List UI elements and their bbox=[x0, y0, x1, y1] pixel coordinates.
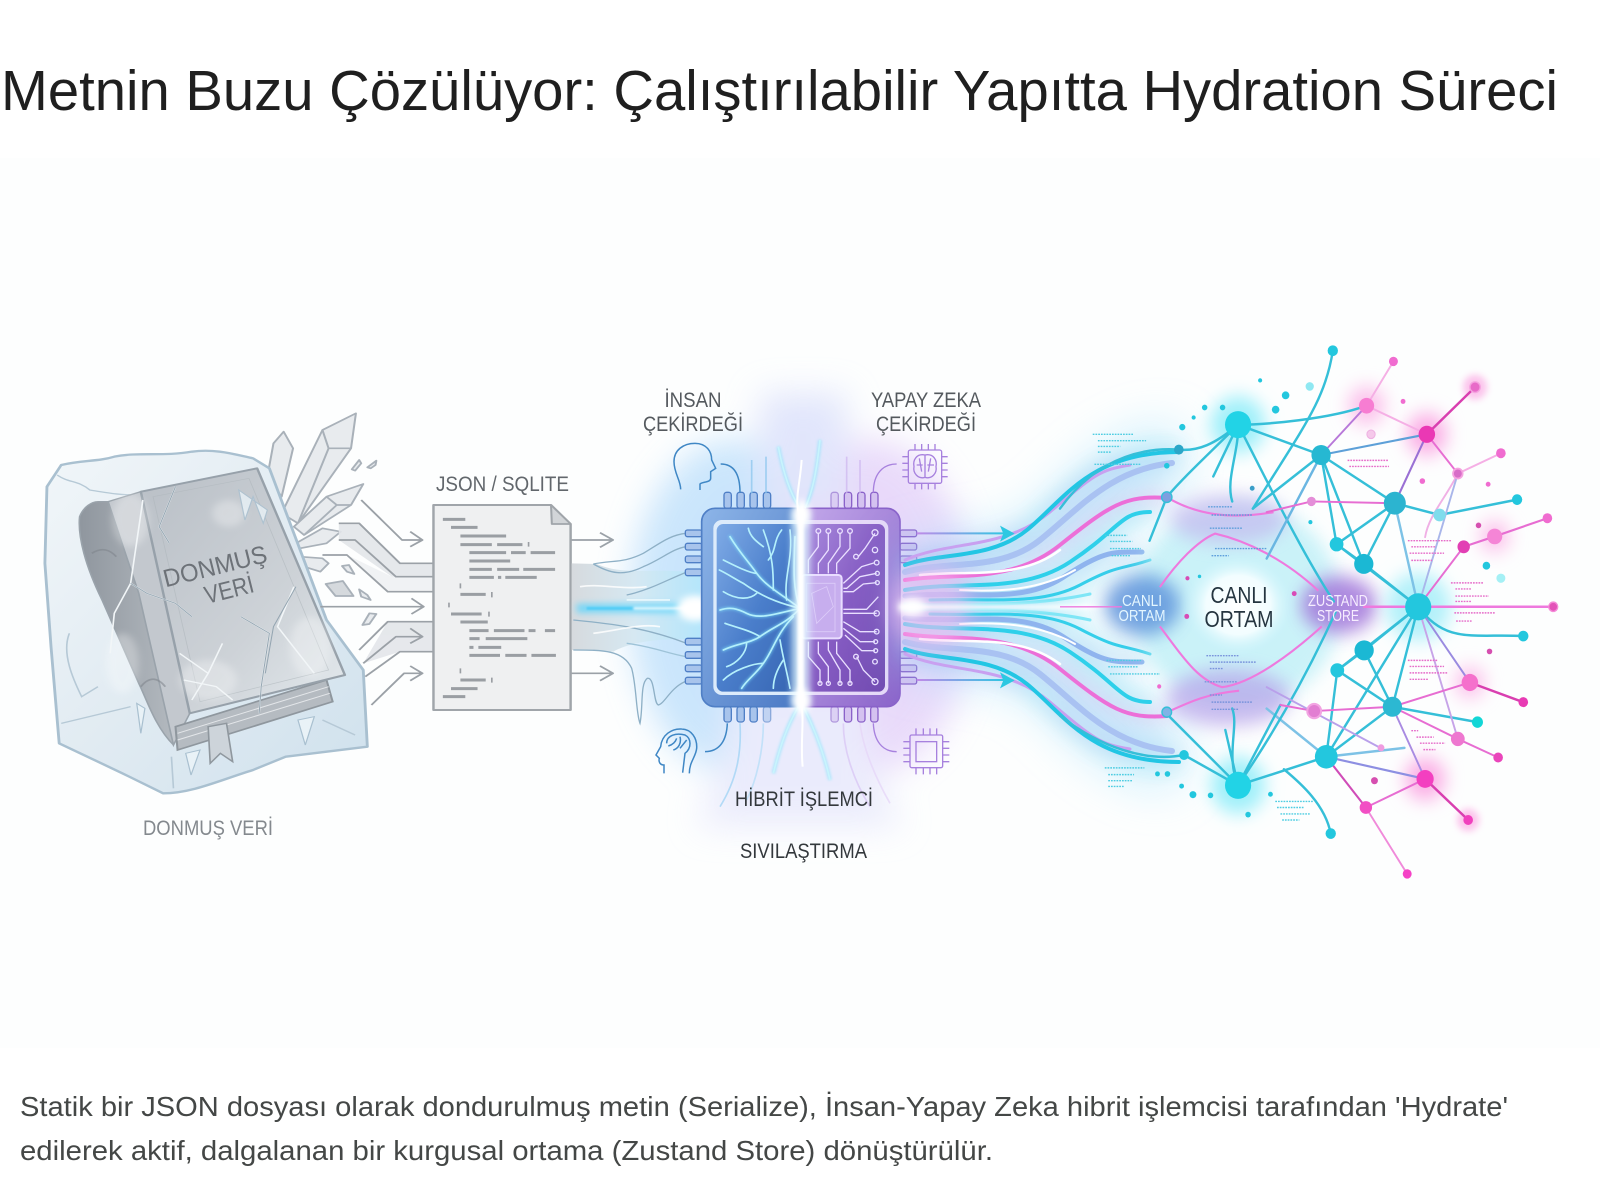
caption: Statik bir JSON dosyası olarak dondurulmuş metin (Serialize), İnsan-Yapay Zeka hibrit işlemcisi tarafından 'Hydrate' bbox=[20, 1091, 1508, 1122]
ice details bbox=[57, 475, 355, 788]
label: live environment small: CANLI bbox=[1122, 593, 1162, 610]
energy seam bbox=[773, 440, 830, 780]
panel: frozen data bbox=[45, 413, 613, 840]
cracks and frost bbox=[110, 487, 314, 713]
magenta network edges bbox=[1267, 361, 1547, 874]
panel: live environment network bbox=[1060, 345, 1558, 879]
magenta nodes bbox=[1157, 357, 1558, 879]
glow background bbox=[630, 393, 973, 827]
label: liquefaction: SIVILAŞTIRMA bbox=[740, 840, 867, 863]
streams below chip bbox=[720, 457, 890, 807]
caption: edilerek aktif, dalgalanan bir kurgusal ortama (Zustand Store) dönüştürülür. bbox=[20, 1135, 993, 1166]
label: live environment center: CANLI bbox=[1210, 582, 1268, 608]
icon: brain head bbox=[656, 723, 727, 773]
flow arrows bbox=[320, 500, 613, 705]
label: ai core: ÇEKİRDEĞİ bbox=[876, 413, 976, 436]
flow streams: chip to network bbox=[890, 452, 1180, 762]
label: ai core: YAPAY ZEKA bbox=[871, 389, 981, 412]
bookmark bbox=[208, 723, 233, 763]
network glows bbox=[1105, 375, 1510, 831]
title: Metnin Buzu Çözülüyor: Çalıştırılabilir Yapıtta Hydration Süreci bbox=[1, 59, 1558, 123]
cyan network edges bbox=[1060, 351, 1523, 834]
crystals bbox=[267, 413, 376, 625]
cyan nodes bbox=[1155, 345, 1528, 839]
panel: hybrid processor bbox=[572, 393, 973, 827]
label: zustand store: ZUSTAND bbox=[1308, 593, 1368, 610]
chip pins bbox=[685, 492, 771, 722]
output arrow top bbox=[917, 526, 1015, 542]
label: ai core bbox=[871, 389, 981, 436]
ai circuit panel bbox=[802, 524, 885, 692]
label: frozen data: DONMUŞ VERİ bbox=[143, 817, 273, 840]
label: human core: ÇEKİRDEĞİ bbox=[643, 413, 743, 436]
flow bands bbox=[339, 523, 433, 663]
label: live environment small: ORTAM bbox=[1118, 608, 1166, 625]
melting stream bbox=[572, 563, 700, 652]
label: zustand store bbox=[1308, 593, 1368, 625]
cyan energy streak bbox=[577, 596, 713, 621]
label: zustand store: STORE bbox=[1317, 608, 1359, 625]
output arrow bottom bbox=[917, 672, 1015, 688]
icon: ai brain chip bbox=[873, 444, 948, 493]
book cover bbox=[141, 468, 345, 713]
label: json sqlite: JSON / SQLITE bbox=[436, 473, 569, 496]
ice block bbox=[45, 451, 367, 793]
processor labels bbox=[643, 389, 981, 863]
label: human core bbox=[643, 389, 743, 436]
label: book title: DONMUŞ bbox=[160, 540, 270, 593]
icon: chip bbox=[873, 723, 949, 774]
label: live environment center: ORTAM bbox=[1204, 606, 1274, 632]
icon: human head bbox=[674, 443, 740, 493]
central pink lens curves bbox=[1060, 497, 1553, 714]
image background bbox=[0, 158, 1600, 1048]
book pages bbox=[176, 680, 333, 750]
micro data text marks bbox=[1093, 434, 1495, 820]
code document bbox=[433, 505, 571, 710]
label: human core: İNSAN bbox=[664, 389, 722, 412]
label: book title bbox=[160, 540, 276, 618]
caption bbox=[20, 1091, 1508, 1166]
label: live environment center bbox=[1204, 582, 1274, 632]
book hinge bbox=[108, 492, 190, 745]
label: live environment small bbox=[1118, 593, 1166, 625]
label: hybrid processor: HİBRİT İŞLEMCİ bbox=[735, 788, 873, 811]
book spine bbox=[79, 502, 173, 745]
chip body bbox=[702, 508, 802, 707]
label: book title: VERİ bbox=[201, 570, 257, 610]
frost overlay bbox=[106, 493, 331, 700]
human neural panel bbox=[717, 524, 802, 692]
